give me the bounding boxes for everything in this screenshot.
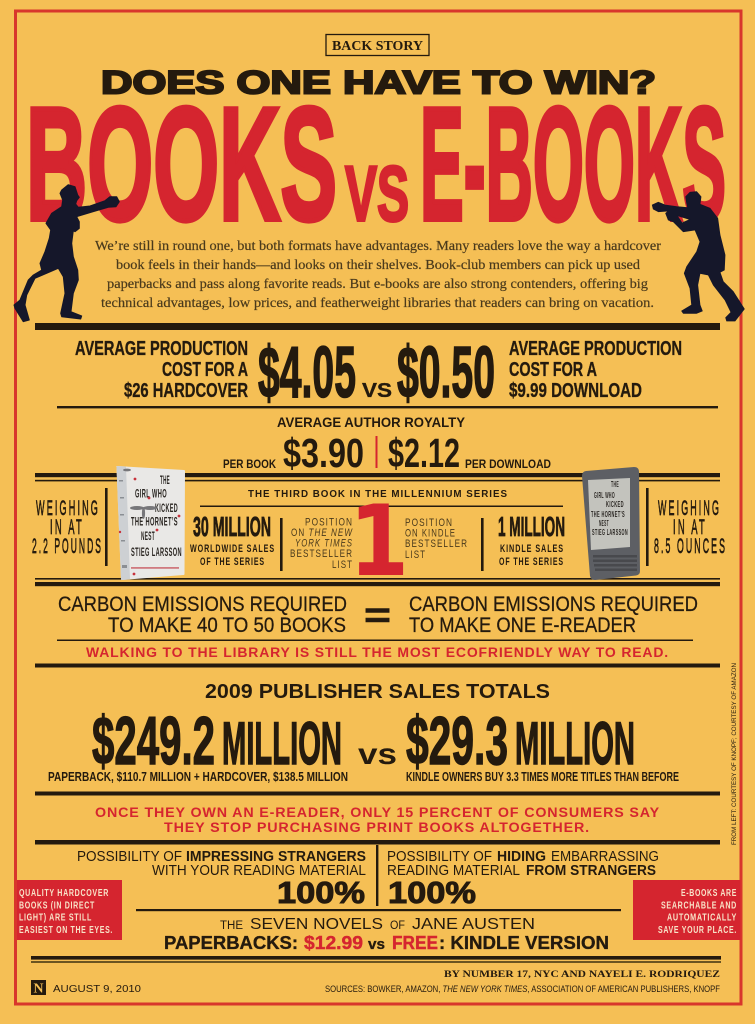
panel: jane austen: FREE bbox=[392, 933, 438, 953]
production cost label: download: $9.99 DOWNLOAD bbox=[509, 380, 642, 402]
panel: impressing strangers: 100% bbox=[277, 875, 365, 910]
stat: 30 million bbox=[190, 511, 275, 568]
panel: publisher sales: 2009 PUBLISHER SALES TOTALS bbox=[205, 681, 550, 703]
panel: author royalty bbox=[223, 414, 551, 476]
title: books vs e-books: VS bbox=[345, 150, 409, 238]
panel: carbon emissions: CARBON EMISSIONS REQUIRED bbox=[409, 593, 698, 616]
panel: publisher sales: PAPERBACK, $110.7 MILLION + HARDCOVER, $138.5 MILLION bbox=[48, 769, 348, 784]
callout: hardcover eyes: BOOKS (IN DIRECT bbox=[19, 900, 95, 912]
position: new york times list: LIST bbox=[332, 559, 353, 571]
intro paragraph: We’re still in round one, but both formats have advantages. Many readers love the way a hardcover bbox=[95, 238, 661, 253]
production cost label: download: AVERAGE PRODUCTION bbox=[509, 338, 682, 360]
production cost label: hardcover: COST FOR A bbox=[162, 359, 248, 381]
panel: the third book comparison bbox=[32, 466, 727, 599]
panel: author royalty: $2.12 bbox=[388, 430, 460, 476]
production cost label: hardcover bbox=[75, 338, 248, 402]
equals sign: = bbox=[364, 594, 391, 635]
panel: hiding embarrassing material: EMBARRASSING bbox=[551, 849, 659, 865]
callout: e-reader owners: ONCE THEY OWN AN E-READER, ONLY 15 PERCENT OF CONSUMERS SAY bbox=[95, 805, 660, 820]
position: new york times list: ON THE NEW bbox=[291, 527, 353, 539]
intro paragraph: paperbacks and pass along favorite reads. But e-books are also strong contenders, offering big bbox=[107, 276, 648, 291]
position: kindle list bbox=[405, 517, 468, 561]
position: kindle list: POSITION bbox=[405, 517, 453, 529]
sales: kindle: $29.3 bbox=[406, 703, 508, 779]
panel: hiding embarrassing material: FROM STRANGERS bbox=[526, 863, 656, 879]
panel: jane austen: SEVEN NOVELS bbox=[250, 916, 383, 933]
panel: author royalty: $3.90 bbox=[283, 430, 364, 476]
footer: newsweek mark and date bbox=[31, 980, 141, 996]
panel: publisher sales: MILLION bbox=[222, 710, 342, 777]
icon: kindle e-reader bbox=[582, 467, 640, 580]
footer: sources: SOURCES: BOWKER, AMAZON, THE NEW YORK TIMES, ASSOCIATION OF AMERICAN PUBLISHERS, KNOPF bbox=[325, 984, 720, 995]
panel: author royalty: PER DOWNLOAD bbox=[465, 459, 551, 471]
panel: hiding embarrassing material: POSSIBILITY OF bbox=[387, 849, 492, 865]
panel: author royalty: AVERAGE AUTHOR ROYALTY bbox=[277, 414, 466, 430]
icon: kindle e-reader: NEST bbox=[599, 518, 609, 528]
number: $4.05: $4.05 bbox=[258, 333, 356, 413]
position: new york times list: POSITION bbox=[305, 516, 353, 528]
icon: right boxer silhouette bbox=[652, 192, 744, 321]
icon: hardcover book: THE bbox=[160, 473, 170, 487]
vs: VS bbox=[362, 380, 392, 402]
sales: kindle: MILLION bbox=[515, 710, 635, 777]
position: kindle list: ON KINDLE bbox=[405, 528, 456, 540]
weight: e-reader bbox=[654, 497, 727, 558]
panel: hiding embarrassing material: READING MATERIAL bbox=[387, 863, 520, 879]
icon: kindle e-reader: STIEG LARSSON bbox=[592, 527, 628, 537]
panel: the third book comparison: 1 MILLION bbox=[498, 511, 565, 542]
panel: hiding embarrassing material bbox=[387, 849, 659, 910]
intro paragraph: book feels in their hands—and looks on their shelves. Book-club members can pick up used bbox=[116, 257, 640, 272]
icon: kindle e-reader: KICKED bbox=[606, 499, 624, 509]
icon: hardcover book: KICKED bbox=[155, 501, 178, 515]
panel: jane austen bbox=[164, 916, 609, 953]
position: new york times list: BESTSELLER bbox=[290, 548, 353, 560]
heading: does one have to win: DOES ONE HAVE TO WIN? bbox=[101, 64, 656, 100]
panel: carbon emissions: TO MAKE 40 TO 50 BOOKS bbox=[108, 614, 346, 637]
panel: jane austen: PAPERBACKS: bbox=[164, 933, 298, 953]
panel: impressing strangers bbox=[77, 849, 366, 910]
callout: hardcover eyes: EASIEST ON THE EYES. bbox=[19, 924, 113, 936]
production cost label: download bbox=[509, 338, 682, 402]
stat: 30 million: WORLDWIDE SALES bbox=[190, 543, 275, 555]
production cost label: hardcover: AVERAGE PRODUCTION bbox=[75, 338, 248, 360]
icon: hardcover book bbox=[116, 466, 185, 580]
panel: carbon emissions: TO MAKE ONE E-READER bbox=[409, 614, 636, 637]
panel: the third book comparison: WEIGHING bbox=[36, 497, 100, 520]
panel: impressing strangers: WITH YOUR READING MATERIAL bbox=[152, 863, 366, 879]
label: back story bbox=[326, 34, 429, 56]
number: $0.50: $0.50 bbox=[397, 333, 495, 413]
stat: 30 million: 30 MILLION bbox=[193, 511, 271, 542]
vs: vs bbox=[358, 738, 397, 771]
photo credit: FROM LEFT: COURTESY OF KNOPF; COURTESY OF AMAZON bbox=[731, 663, 738, 845]
panel: jane austen: THE bbox=[220, 920, 243, 932]
position: kindle list: BESTSELLER bbox=[405, 538, 468, 550]
production cost label: download: COST FOR A bbox=[509, 359, 597, 381]
panel: production cost bbox=[75, 333, 682, 413]
panel: carbon emissions bbox=[58, 593, 698, 637]
icon: kindle e-reader: THE HORNET’S bbox=[591, 509, 625, 519]
sales: print: $249.2 bbox=[92, 703, 215, 779]
position: new york times list: YORK TIMES bbox=[295, 538, 353, 550]
callout: e-reader owners bbox=[95, 805, 660, 835]
panel: jane austen: $12.99 bbox=[304, 933, 363, 953]
stat: 30 million: OF THE SERIES bbox=[200, 556, 265, 568]
panel: hiding embarrassing material: HIDING bbox=[497, 849, 546, 865]
footer: byline: BY NUMBER 17, NYC AND NAYELI E. RODRIQUEZ bbox=[444, 970, 720, 980]
panel: jane austen: JANE AUSTEN bbox=[412, 916, 535, 933]
icon: hardcover book: GIRL WHO bbox=[135, 486, 167, 500]
callout: e-reader owners: THEY STOP PURCHASING PRINT BOOKS ALTOGETHER. bbox=[164, 820, 590, 835]
production cost label: hardcover: $26 HARDCOVER bbox=[124, 380, 248, 402]
footer: newsweek mark and date: N bbox=[34, 980, 44, 996]
panel: carbon emissions: CARBON EMISSIONS REQUIRED bbox=[58, 593, 347, 616]
series caption: THE THIRD BOOK IN THE MILLENNIUM SERIES bbox=[248, 489, 508, 500]
stat: 1 million: KINDLE SALES bbox=[500, 543, 564, 555]
panel: jane austen: vs bbox=[368, 936, 385, 953]
panel: the third book comparison: STIEG LARSSON bbox=[131, 545, 182, 559]
icon: hardcover book: NEST bbox=[141, 529, 155, 543]
weight: hardcover bbox=[32, 497, 103, 558]
icon: kindle e-reader: GIRL WHO bbox=[594, 490, 615, 500]
weight: e-reader: IN AT bbox=[673, 516, 707, 539]
icon: left boxer silhouette bbox=[14, 185, 119, 322]
panel: the third book comparison: 2.2 POUNDS bbox=[32, 535, 103, 558]
panel: publisher sales bbox=[48, 681, 679, 784]
stat: 1 million: OF THE SERIES bbox=[499, 556, 564, 568]
panel: hiding embarrassing material: 100% bbox=[388, 875, 476, 910]
callout: e-books searchable bbox=[633, 880, 740, 940]
position: kindle list: LIST bbox=[405, 549, 426, 561]
stat: 1 million bbox=[498, 511, 565, 568]
label: back story: BACK STORY bbox=[332, 39, 423, 54]
callout: hardcover eyes: QUALITY HARDCOVER bbox=[19, 887, 109, 899]
footer: newsweek mark and date: AUGUST 9, 2010 bbox=[53, 984, 141, 995]
intro paragraph bbox=[95, 238, 661, 310]
title: books vs e-books: BOOKS bbox=[26, 74, 337, 254]
panel: impressing strangers: IMPRESSING STRANGERS bbox=[186, 849, 366, 865]
callout: hardcover eyes bbox=[17, 880, 122, 940]
panel: impressing strangers: POSSIBILITY OF bbox=[77, 849, 182, 865]
number one: 1 bbox=[349, 485, 409, 599]
icon: hardcover book: THE HORNET’S bbox=[131, 514, 178, 528]
callout: walking to the library: WALKING TO THE LIBRARY IS STILL THE MOST ECOFRIENDLY WAY TO READ. bbox=[86, 645, 669, 660]
position: new york times list bbox=[290, 516, 353, 571]
intro paragraph: technical advantages, low prices, and featherweight libraries that readers can bring on vacation. bbox=[101, 295, 654, 310]
callout: hardcover eyes: LIGHT) ARE STILL bbox=[19, 912, 92, 924]
panel: jane austen: OF bbox=[390, 920, 405, 932]
panel: author royalty: PER BOOK bbox=[223, 459, 277, 471]
panel: jane austen: : KINDLE VERSION bbox=[439, 933, 609, 953]
weight: hardcover: IN AT bbox=[50, 516, 84, 539]
icon: kindle e-reader: THE bbox=[611, 479, 619, 489]
